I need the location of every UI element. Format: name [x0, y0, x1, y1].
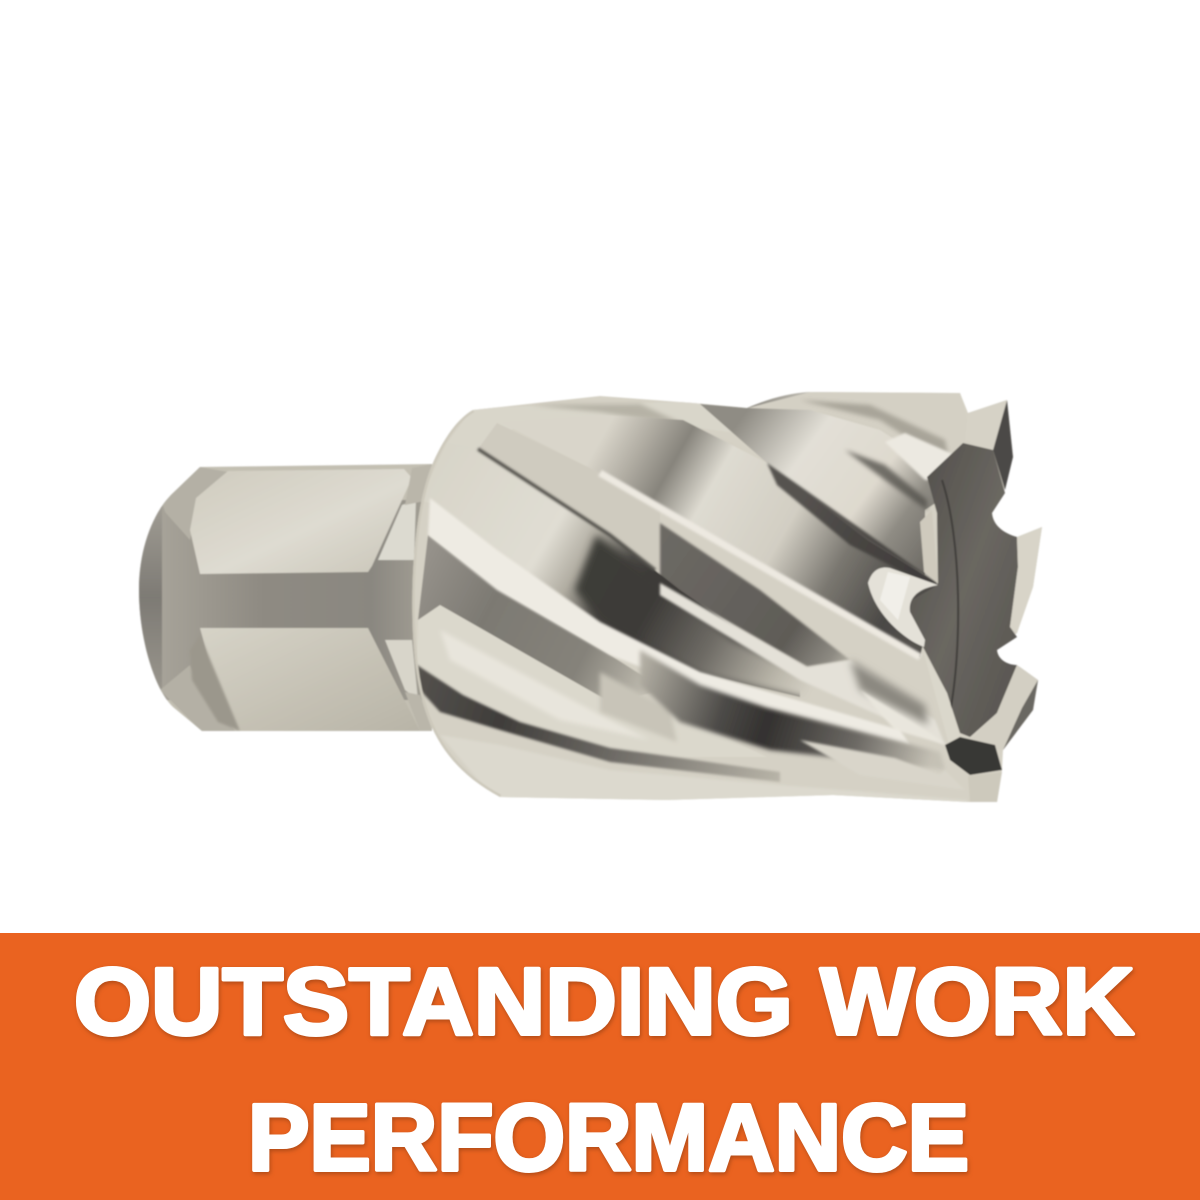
light strip next to dark flat: [660, 583, 945, 745]
top land near back rim: [447, 400, 790, 449]
upper wrench flat: [190, 469, 412, 574]
knurled corner: [191, 646, 240, 731]
tooth top: [993, 400, 1013, 490]
rim: [412, 410, 500, 797]
caption band: [0, 933, 1200, 1200]
light ridge: [600, 473, 920, 657]
cutter shank: [135, 460, 435, 735]
dark flat: [660, 523, 850, 667]
panel P2: [419, 604, 596, 695]
light tooth wedge: [800, 738, 920, 770]
white strip: [428, 498, 910, 745]
thin ridge line: [478, 449, 655, 570]
cutter teeth face: [868, 400, 1042, 802]
lower dark flute: [417, 665, 780, 782]
central dark flute: [575, 535, 810, 700]
infographic page: [0, 391, 1200, 1200]
caption text line 2: PERFORMANCE: [248, 1085, 969, 1191]
tooth left edge: [920, 510, 938, 583]
textured pane: [600, 480, 660, 583]
panel P1 fading to dark flute: [466, 467, 800, 698]
caption text: OUTSTANDING WORK: [74, 949, 1134, 1055]
mid grey face below strip: [418, 535, 665, 702]
cutter body: [400, 385, 1050, 810]
second dark flute: [640, 650, 945, 770]
tooth right: [1010, 527, 1042, 633]
tooth bottom tip: [945, 737, 1002, 775]
curved gullet: [868, 568, 938, 647]
band above long ridge, textured: [481, 424, 510, 447]
textured pane lower: [600, 672, 677, 742]
background: [0, 0, 1200, 933]
lower wrench flat: [200, 628, 420, 731]
bottom land: [447, 738, 907, 799]
product photo: annular cutter: [135, 385, 1050, 810]
lower left edge: [923, 650, 960, 748]
dark wedge under flute: [767, 463, 937, 583]
tooth lower right: [972, 665, 1038, 750]
dark inner face: [910, 443, 1018, 737]
upper right flute: [700, 392, 936, 576]
